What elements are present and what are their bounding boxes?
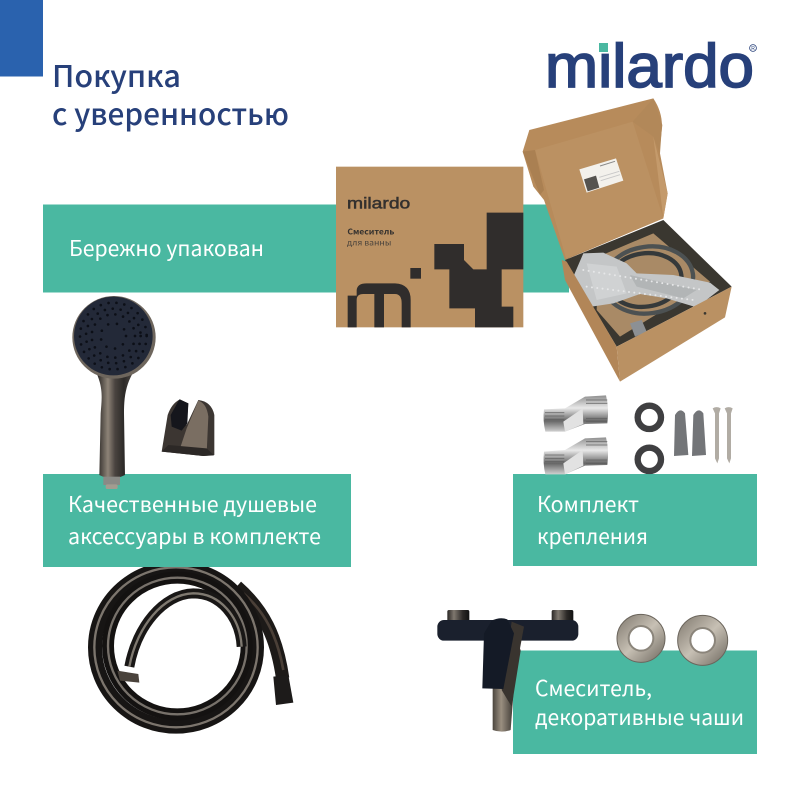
panel: mounting kit — [513, 474, 757, 566]
panel: carefully packed band: Бережно упакован — [69, 232, 264, 263]
label with QR — [579, 158, 623, 193]
icon: decorative bowls — [617, 614, 728, 665]
box caption: Смеситель — [347, 227, 395, 238]
threaded fittings — [544, 395, 608, 474]
nozzles — [80, 303, 147, 369]
icon: shower holder — [162, 399, 214, 456]
panel: mixer and decorative bowls — [513, 650, 757, 754]
box caption: для ванны — [347, 238, 391, 249]
hose fittings — [117, 671, 139, 683]
box caption — [347, 227, 395, 249]
lid outside flaps — [523, 98, 668, 260]
box interior — [565, 220, 732, 347]
black rings — [638, 406, 661, 471]
panel: shower accessories: Качественные душевые — [68, 488, 317, 519]
lid inside — [535, 122, 663, 258]
icon: shower hose — [94, 567, 293, 727]
panel: mounting kit: Комплект — [537, 488, 639, 519]
panel: mixer and decorative bowls: Смеситель, — [535, 672, 652, 703]
title: Покупка — [52, 52, 181, 96]
icon: hand shower — [72, 296, 156, 489]
icon: faucet — [437, 610, 578, 732]
panel: mixer and decorative bowls: декоративные чаши — [535, 701, 744, 732]
hose in box — [599, 241, 698, 319]
thread marks — [545, 400, 607, 463]
box pattern — [348, 213, 523, 327]
panel: mounting kit: крепления — [537, 520, 648, 551]
box logo: milardo — [347, 196, 410, 213]
logo: milardo: R — [751, 46, 755, 52]
title — [52, 52, 289, 134]
logo: milardo: milardo — [545, 32, 754, 100]
panel: shower accessories: аксессуары в комплекте — [68, 520, 321, 551]
open cardboard box — [523, 98, 732, 382]
closed cardboard box — [336, 167, 523, 327]
title: с уверенностью — [52, 90, 289, 134]
bubble wrap — [573, 253, 719, 307]
screws — [713, 407, 733, 463]
icon: mounting hardware — [544, 395, 733, 474]
panel: shower accessories — [43, 474, 351, 567]
panel: carefully packed band — [43, 204, 569, 292]
wall plugs — [674, 410, 706, 456]
blue corner block — [0, 0, 43, 76]
box outer walls — [562, 260, 620, 382]
